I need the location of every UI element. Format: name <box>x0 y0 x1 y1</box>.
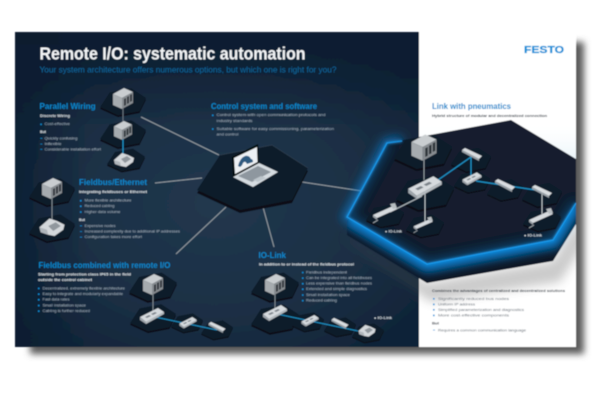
heading: Fieldbus combined with remote I/O <box>38 260 171 270</box>
text block: Easy to integrate and modularly expandable <box>42 291 123 296</box>
panel: IO-Link <box>251 250 392 344</box>
central hub hexagon <box>197 144 308 213</box>
panel: large pneumatics hexagon platform <box>347 120 590 302</box>
text block: advantages: More cost-effective components <box>438 312 509 317</box>
heading: IO-Link <box>258 250 286 260</box>
text block <box>38 272 132 313</box>
subheading: Hybrid structure of modular and decentralized connection <box>432 113 548 118</box>
subtitle: Your system architecture offers numerous options, but which one is right for you? <box>40 64 337 74</box>
panel: fieldbus combined with remote I/O <box>38 260 233 341</box>
text block <box>40 113 102 151</box>
text block: Expensive nodes <box>84 223 116 228</box>
text block: Extended and simple diagnostics <box>306 286 367 291</box>
text block: Higher data volume <box>84 209 120 214</box>
glow above large hexagon on white panel <box>419 120 576 175</box>
text block: advantages: But <box>432 320 440 325</box>
label: IO-Link left: ● IO-Link <box>385 230 402 234</box>
pneumatics diagram <box>366 134 562 239</box>
label: IO-Link right: ● IO-Link <box>524 234 542 238</box>
title: Remote I/O: systematic automation <box>40 44 306 64</box>
panel: parallel wiring <box>40 88 146 173</box>
heading: Fieldbus/Ethernet <box>79 177 147 187</box>
text block: Inflexible <box>44 141 62 146</box>
text block: But <box>79 217 86 222</box>
remote I/O diagram <box>129 273 233 341</box>
text block <box>212 112 334 137</box>
text block: industry standards <box>216 118 253 123</box>
text block: Less expensive than fieldbus nodes <box>306 281 372 286</box>
parallel wiring diagram <box>100 88 146 173</box>
heading: Link with pneumatics <box>432 101 511 111</box>
text block: Can be integrated into all fieldbuses <box>306 275 372 280</box>
text block: Increased complexity due to additional IP addresses <box>84 228 180 234</box>
text block: Starting from protection class IP65 in the field <box>38 272 132 276</box>
text block: Decentralized, extremely flexible architecture <box>42 285 125 290</box>
text block: Configuration takes more effort <box>84 234 143 239</box>
logo: FESTO: FESTO <box>524 44 564 56</box>
text block: advantages <box>432 288 565 332</box>
panel: link with pneumatics <box>366 101 565 332</box>
poster white panel <box>15 32 576 347</box>
text block: advantages: Requires a common communication language <box>438 327 526 332</box>
panel: control system and software <box>211 101 334 137</box>
text block: Small installation space <box>42 302 86 307</box>
label: IO-Link: ● IO-Link <box>374 316 392 320</box>
text block: In addition to or instead of the fieldbus protocol <box>259 262 354 267</box>
poster drop shadow <box>30 42 584 354</box>
text block: advantages: Significantly reduced bus nodes <box>438 296 509 301</box>
text block <box>259 262 372 302</box>
text block: Discrete Wiring <box>40 113 71 118</box>
text block: Cost-effective <box>44 121 70 126</box>
IO-Link diagram <box>251 273 392 344</box>
text block: advantages: Uniform IP address <box>438 301 475 306</box>
poster dark background <box>15 32 419 347</box>
text block: Integrating fieldbuses or Ethernet <box>79 189 148 194</box>
text block: Suitable software for easy commissioning, parameterization <box>216 126 334 131</box>
panel: fieldbus / ethernet <box>29 177 180 243</box>
text block: More flexible architecture <box>84 198 132 203</box>
text block <box>79 189 180 239</box>
icon: laptop <box>232 144 278 187</box>
heading: Parallel Wiring <box>40 101 96 111</box>
text block: Control system with open communication protocols and <box>216 112 326 117</box>
text block: Considerable installation effort <box>44 146 102 151</box>
text block: outside the control cabinet <box>38 277 93 282</box>
text block: and control <box>216 132 239 137</box>
text block: Quickly confusing <box>44 135 78 140</box>
text block: But <box>40 129 47 134</box>
text block: Reduced cabling <box>306 298 337 302</box>
text block: Small installation space <box>306 292 350 297</box>
text block: Reduced cabling <box>84 203 114 208</box>
text block: advantages: Combines the advantages of centralized and decentralized solutions <box>432 288 565 293</box>
fieldbus diagram <box>29 178 75 243</box>
text block: Fieldbus independent <box>306 269 348 274</box>
text block: advantages: Simplified parameterization and diagnostics <box>438 307 524 312</box>
connector lines to central hub <box>141 117 362 254</box>
text block: Cabling is further reduced <box>42 308 90 313</box>
heading: Control system and software <box>211 101 317 111</box>
text block: Fast data rates <box>42 297 70 302</box>
